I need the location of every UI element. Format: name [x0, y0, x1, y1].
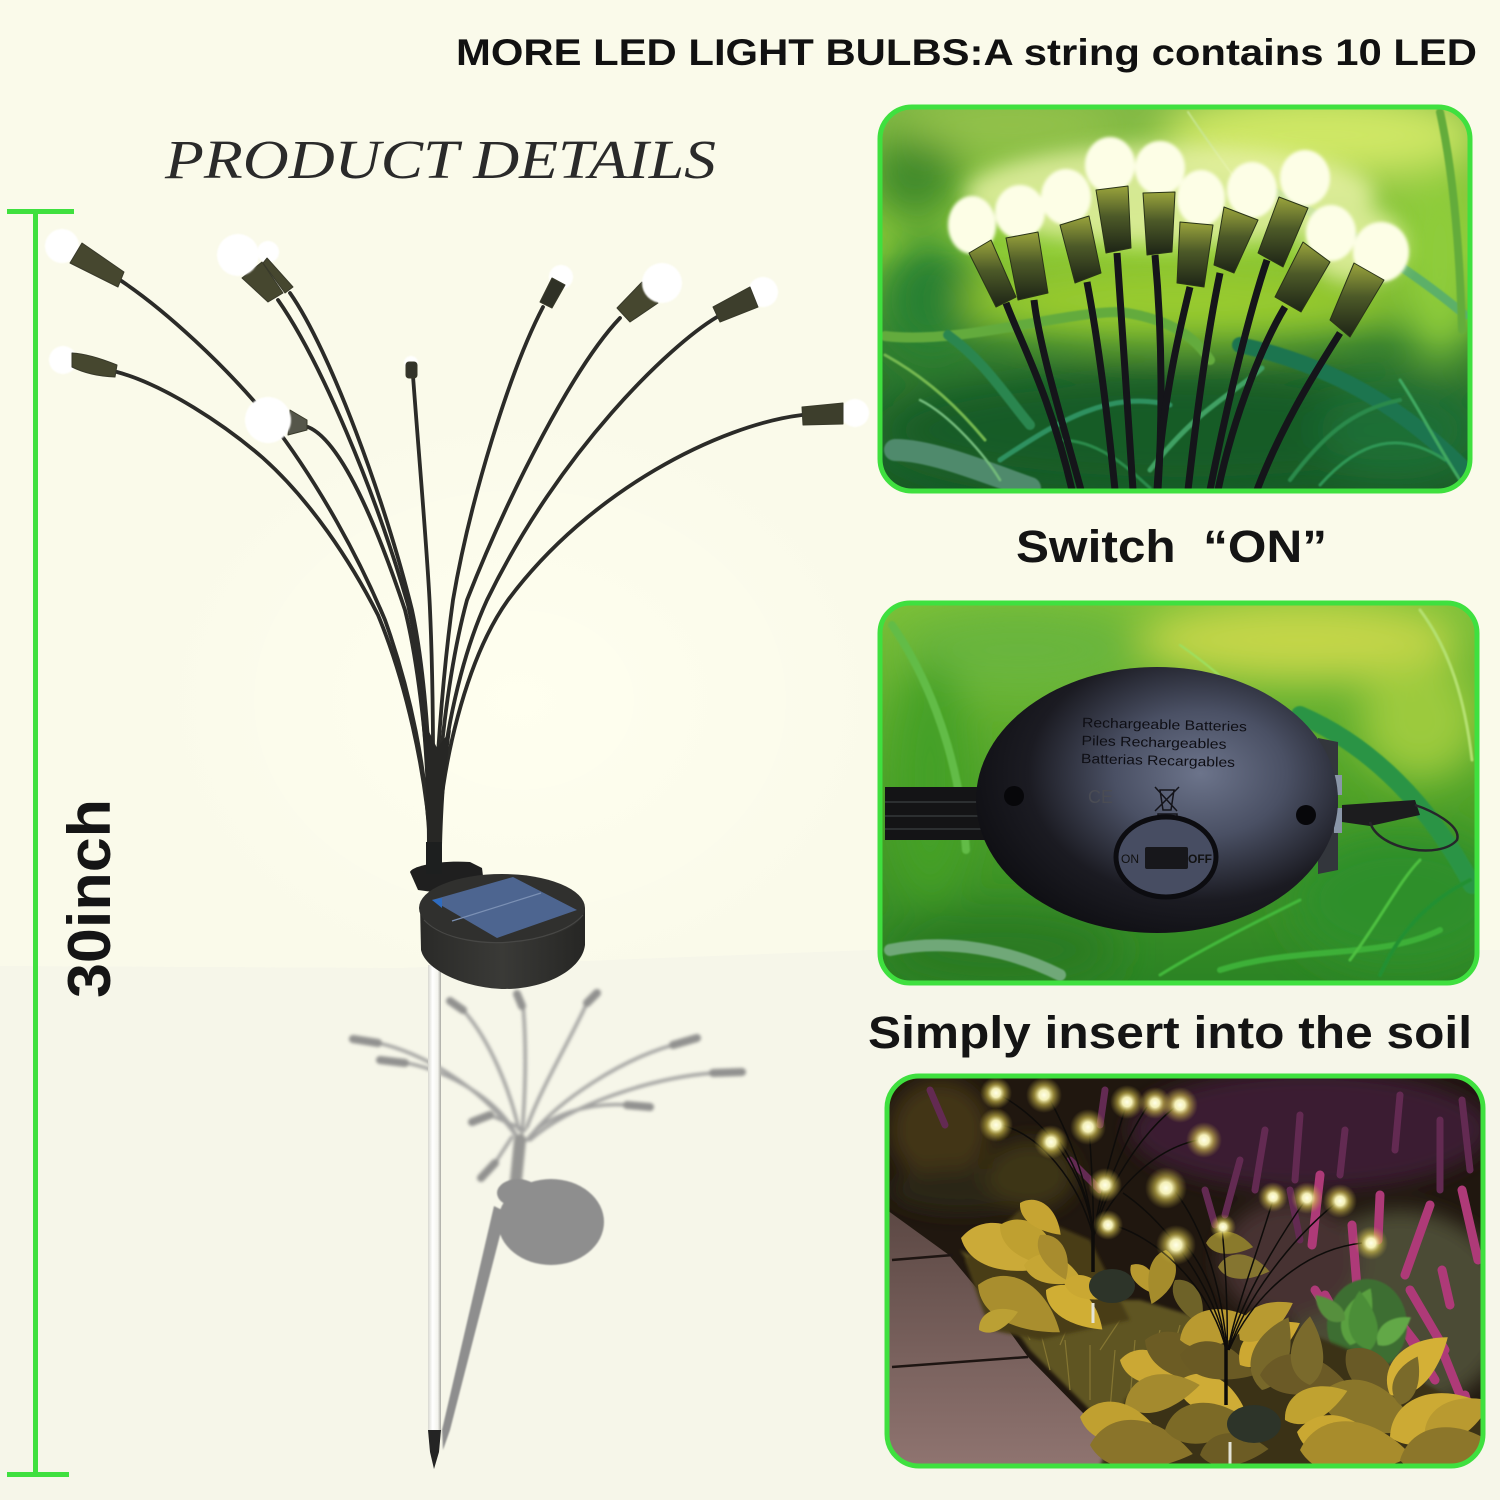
panel: LED bulbs in grass — [870, 90, 1480, 491]
screws — [1004, 786, 1024, 806]
shadow of lamp on ground — [353, 993, 742, 1190]
shadow of solar base and stake — [442, 1179, 604, 1450]
lamp trunks — [1093, 1230, 1226, 1405]
bulbs behind caps — [45, 229, 869, 427]
side clip and cable loop — [1318, 738, 1458, 874]
cable bundle — [885, 787, 985, 840]
battery box text: Piles Rechargeables — [1081, 733, 1227, 752]
yellow leaves — [961, 1200, 1480, 1464]
battery box — [976, 667, 1338, 933]
pathway — [890, 1212, 1104, 1464]
caption: insert into soil: Simply insert into the soil — [868, 1007, 1472, 1058]
grass blades — [890, 610, 1472, 975]
panel: battery box and switch — [880, 600, 1500, 990]
lamp head caps — [70, 243, 843, 435]
panel: garden at night — [887, 1070, 1500, 1480]
connector clip — [410, 842, 483, 893]
blurred grass background — [880, 600, 1500, 990]
lamp stems — [1000, 1095, 1362, 1350]
leaf cluster shadows — [965, 1210, 1483, 1466]
height dimension line — [7, 209, 74, 1477]
black stems — [1006, 253, 1340, 490]
glowing bulbs — [948, 137, 1409, 282]
white stake — [428, 965, 441, 1469]
glowing lights — [979, 1077, 1388, 1265]
height label: 30inch: 30inch — [56, 799, 123, 998]
on off switch: OFF — [1188, 852, 1212, 866]
dry grass — [960, 1250, 1239, 1410]
blurred grass background — [882, 110, 1468, 482]
panel border — [880, 603, 1477, 983]
caption: switch on: Switch “ON” — [1016, 521, 1327, 572]
title: product details: PRODUCT DETAILS — [164, 129, 716, 190]
grass blades — [885, 112, 1465, 488]
lamp caps — [969, 186, 1384, 337]
lavender spikes — [930, 1090, 1478, 1430]
lamp product — [45, 229, 869, 1469]
pale stakes — [1093, 1303, 1230, 1466]
on off switch — [1116, 817, 1216, 897]
panel border — [880, 107, 1470, 491]
solar panel — [432, 877, 577, 938]
on off switch: ON — [1121, 852, 1139, 866]
battery box text: Rechargeable Batteries — [1082, 715, 1247, 734]
solar base — [419, 874, 585, 989]
recycling bin mark — [1155, 787, 1179, 817]
bulb glow — [965, 145, 1405, 283]
battery box text — [1081, 715, 1247, 770]
lamp stems — [117, 280, 802, 850]
CE mark: CE — [1088, 787, 1113, 807]
stem bundle — [421, 715, 451, 845]
bulbs in front of caps — [217, 234, 682, 443]
top headline: MORE LED LIGHT BULBS:A string contains 10 LED — [456, 32, 1477, 73]
battery box text: Batterias Recargables — [1081, 751, 1235, 770]
dim foliage background — [890, 1070, 1500, 1410]
green foliage — [1314, 1278, 1412, 1364]
solar bases — [1089, 1269, 1281, 1443]
panel border — [887, 1076, 1483, 1466]
